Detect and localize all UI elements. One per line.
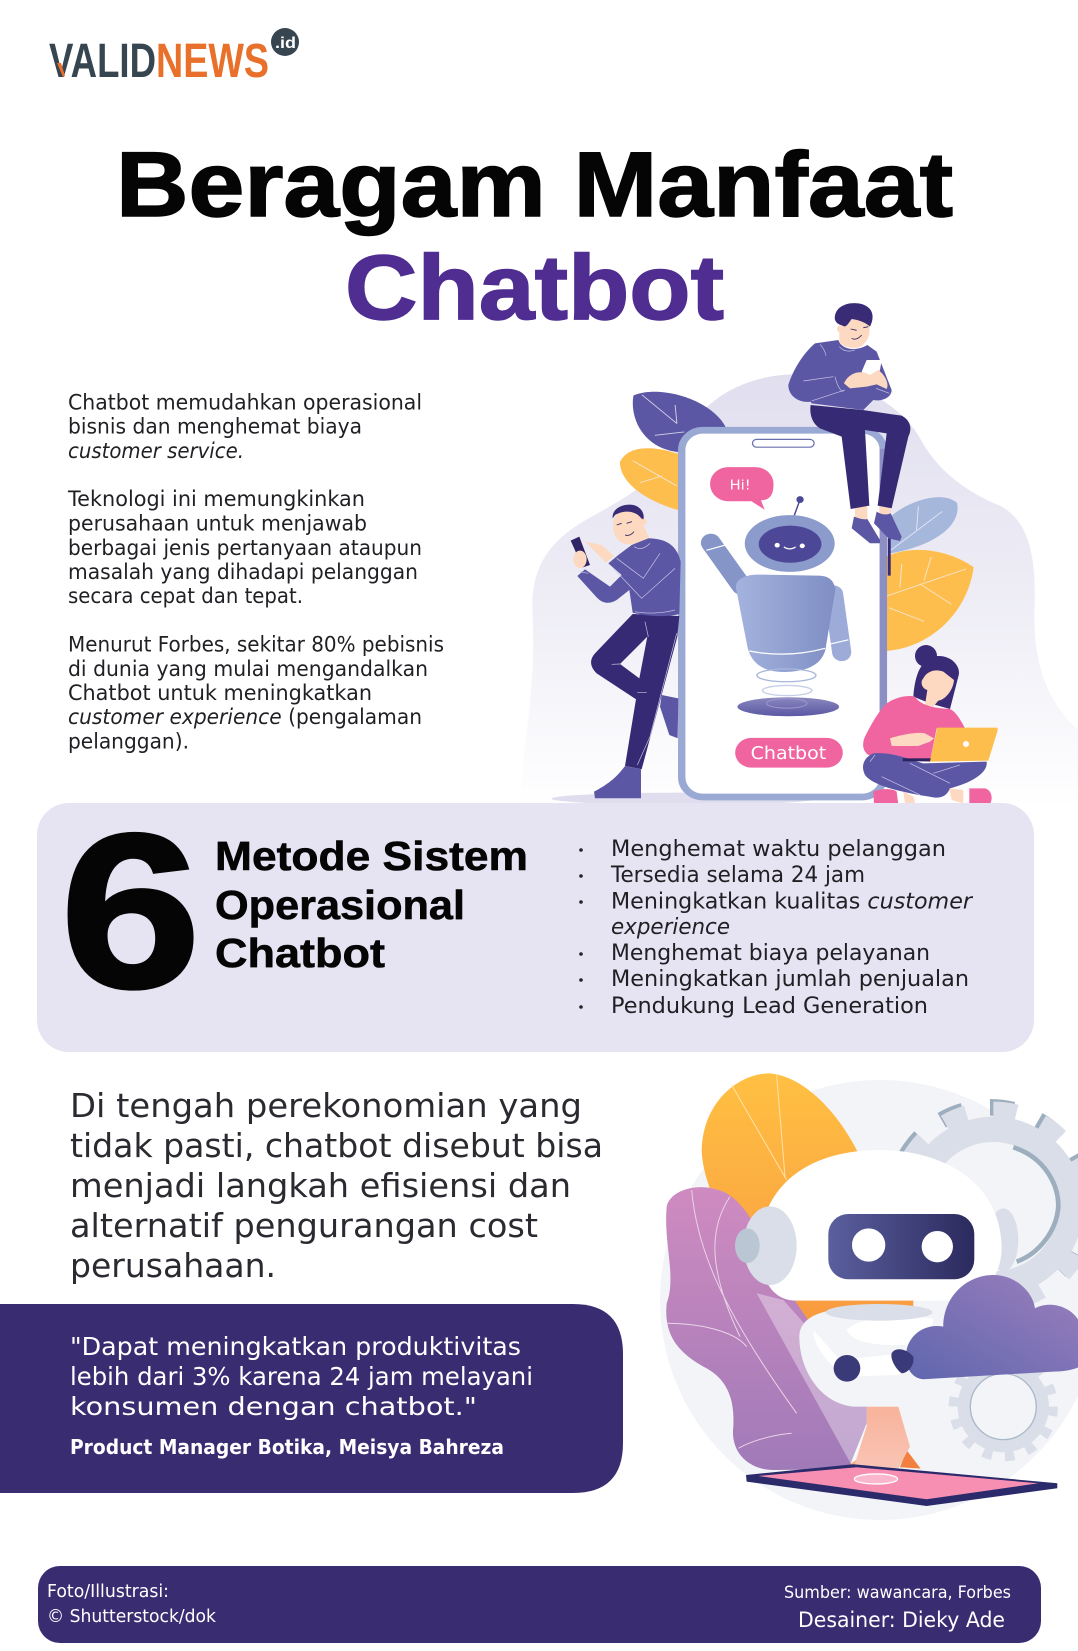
leaf veins [667,1190,797,1448]
panel: intro text: secara cepat dan tepat. [68,584,303,608]
text block: efficiency statement: Di tengah perekonomian yang [70,1086,582,1125]
orange base triangles [845,1450,921,1469]
robot arm tip [891,1349,914,1373]
title: Chatbot [345,237,724,339]
leaf: small yellow [620,448,682,511]
leaf: large yellow [885,550,974,651]
panel: intro text: di dunia yang mulai mengandalkan [68,657,428,681]
panel: intro text: customer experience (pengalaman [68,705,422,729]
panel: 6 metode sistem operasional [37,788,1034,1052]
leaf: light blue [887,497,958,554]
leaf veins [633,395,966,621]
list of benefits: Tersedia selama 24 jam [610,863,865,888]
button: Chatbot [735,738,843,768]
panel: intro text: Chatbot memudahkan operasional [68,390,422,414]
panel: quote [0,1304,623,1493]
robot left ear [735,1206,797,1285]
panel: intro text: Menurut Forbes, sekitar 80% pebisnis [68,633,444,657]
panel heading: Chatbot [215,930,385,976]
peach light stem [853,1407,910,1468]
illustration: robot with cloud and gears [660,1073,1078,1520]
list of benefits: experience [611,915,730,940]
button: Chatbot: Chatbot [751,744,826,764]
robot head [760,1150,1002,1301]
yellow leaf veins [732,1075,787,1180]
source and designer [784,1583,1011,1632]
robot dot [834,1355,860,1382]
quote attribution: Product Manager Botika, Meisya Bahreza [70,1435,504,1459]
title [116,134,953,339]
phone scene [520,374,1078,807]
woman with laptop [863,645,998,804]
logo: Validnews.id [49,28,299,88]
man standing with phone [571,505,681,798]
logo: Validnews.id: NEWS [156,35,269,88]
panel: intro text: masalah yang dihadapi pelanggan [68,560,418,584]
title: Beragam Manfaat [116,134,953,236]
background circle [660,1080,1078,1520]
robot visor [828,1214,974,1279]
cloud [906,1275,1078,1379]
list of benefits: Menghemat biaya pelayanan [611,941,930,966]
panel: intro text: Teknologi ini memungkinkan [67,487,365,511]
photo credit [47,1581,217,1627]
leaf: dark purple [633,392,726,452]
text block: efficiency statement [70,1086,603,1285]
text block: efficiency statement: perusahaan. [70,1246,276,1285]
robot body [799,1308,950,1407]
big number 6: 6 [60,788,201,1034]
photo credit: © Shutterstock/dok [47,1606,217,1627]
panel: intro text: pelanggan). [68,730,189,754]
list of benefits: Meningkatkan kualitas customer [611,890,974,914]
panel: intro text: perusahaan untuk menjawab [68,512,367,536]
panel: intro text: bisnis dan menghemat biaya [68,415,362,439]
list of benefits: Menghemat waktu pelanggan [611,837,946,862]
small gear [954,1357,1053,1456]
quote text: konsumen dengan chatbot." [70,1392,477,1421]
illustration: people around chatbot phone [520,303,1078,807]
ground shadow [552,793,817,805]
quote text: "Dapat meningkatkan produktivitas [70,1332,521,1361]
panel: intro text: customer service. [68,439,244,463]
large gear [893,1107,1078,1303]
list of benefits: Meningkatkan jumlah penjualan [611,967,969,992]
photo credit: Foto/Illustrasi: [47,1581,169,1602]
background blob [520,374,1078,807]
man sitting on phone [788,303,910,543]
robot right ear [988,1208,1018,1272]
yellow leaf [702,1073,913,1343]
panel: intro text [67,390,444,754]
phone [682,430,891,797]
light beam [757,1293,867,1468]
robot body highlight [813,1317,933,1377]
panel: intro text: Chatbot untuk meningkatkan [68,681,372,705]
text block: efficiency statement: menjadi langkah efisiensi dan [70,1166,571,1205]
pink leaf [666,1187,867,1470]
footer [38,1566,1041,1643]
panel heading: Metode Sistem [215,833,528,879]
list of benefits: Pendukung Lead Generation [611,994,928,1019]
speech bubble: Hi!: Hi! [730,478,751,493]
panel: intro text: berbagai jenis pertanyaan ataupun [68,536,422,560]
speech bubble: Hi! [710,467,774,510]
panel heading: Operasional [215,882,465,928]
robot [706,496,848,716]
text block: efficiency statement: tidak pasti, chatbot disebut bisa [70,1126,603,1165]
text block: efficiency statement: alternatif pengurangan cost [70,1206,538,1245]
neck shadow [826,1304,932,1321]
tablet [746,1464,1057,1506]
logo: Validnews.id: VALID [49,35,156,88]
list of benefits [579,837,974,1019]
quote text: lebih dari 3% karena 24 jam melayani [70,1362,533,1391]
source and designer: Sumber: wawancara, Forbes [784,1583,1011,1603]
panel heading [215,833,528,976]
quote text [70,1332,533,1421]
logo: Validnews.id: .id [275,35,296,52]
source and designer: Desainer: Dieky Ade [798,1608,1005,1632]
